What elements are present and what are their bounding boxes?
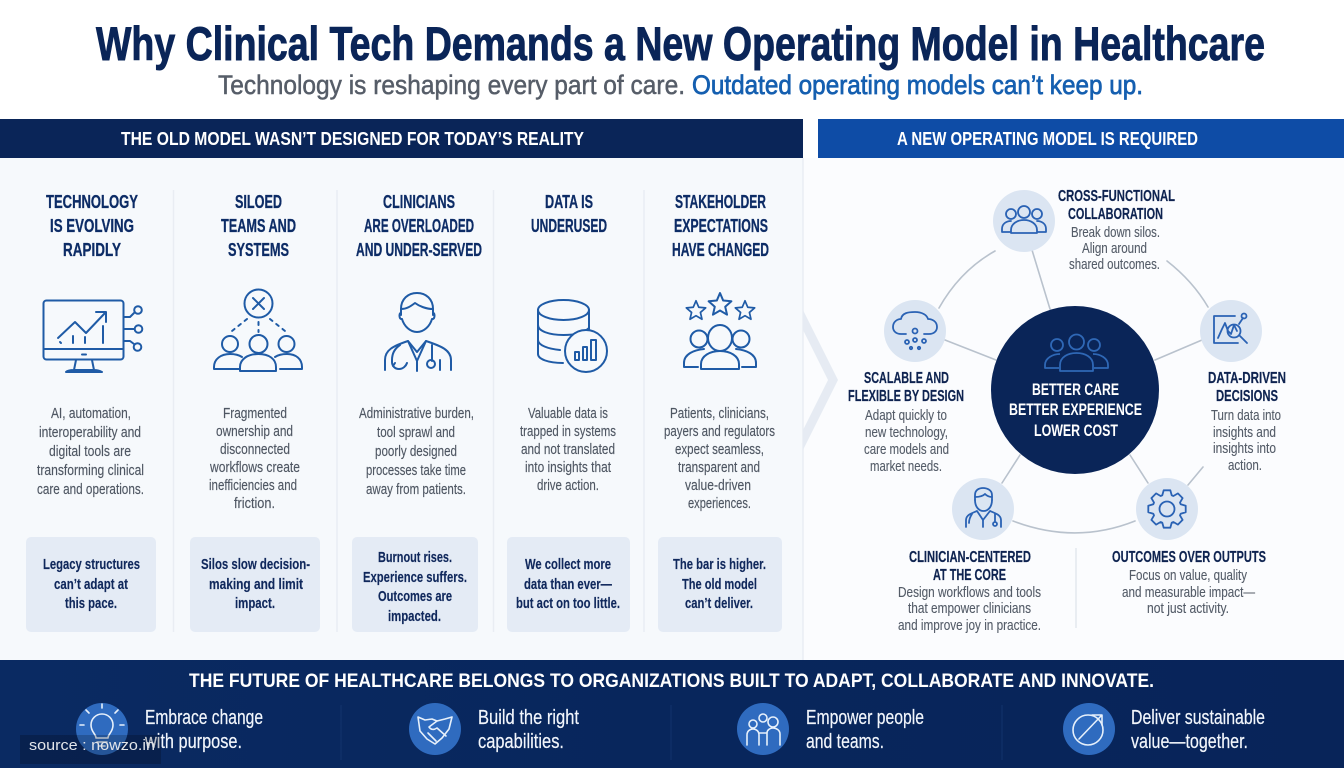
body text [209, 405, 300, 512]
node: data-driven decisions: DECISIONS [1216, 388, 1278, 405]
node: cross-functional collaboration: Break down silos. [1071, 225, 1160, 241]
hub circle [991, 306, 1159, 474]
footer item: deliver value [1063, 703, 1265, 755]
node: scalable and flexible: SCALABLE AND [864, 370, 949, 387]
callout: impacted. [388, 608, 441, 625]
source label: source : nowzo.in [29, 738, 155, 754]
column: clinicians overloaded [352, 191, 482, 632]
heading [672, 191, 769, 260]
footer item: build capabilities: Build the right [478, 706, 579, 729]
heading: SILOED [235, 191, 282, 212]
body text: friction. [234, 495, 275, 512]
heading: AND UNDER-SERVED [356, 239, 482, 260]
body text: ownership and [216, 423, 293, 440]
callout [658, 537, 782, 632]
body text: away from patients. [366, 481, 466, 498]
callout: making and limit [209, 576, 303, 593]
callout: Legacy structures [43, 556, 140, 573]
icon: people [1045, 334, 1108, 371]
node: cross-functional collaboration: CROSS-FUNCTIONAL [1058, 188, 1175, 205]
callout: this pace. [65, 595, 117, 612]
body text: transforming clinical [37, 462, 144, 479]
node: clinician-centered [898, 478, 1041, 634]
icon: cloud network [893, 312, 937, 349]
footer item: deliver value: value—together. [1131, 730, 1248, 753]
callout: Experience suffers. [363, 569, 467, 586]
footer item: deliver value: Deliver sustainable [1131, 706, 1265, 729]
body text: Valuable data is [528, 405, 608, 422]
heading: SYSTEMS [228, 239, 289, 260]
heading: EXPECTATIONS [674, 215, 768, 236]
node: data-driven decisions [1200, 300, 1286, 474]
banner: new model [818, 119, 1344, 158]
node: clinician-centered: and improve joy in practice. [898, 618, 1041, 634]
node: cross-functional collaboration [993, 188, 1175, 273]
callout: The bar is higher. [673, 556, 766, 573]
body text [359, 405, 474, 498]
body text: transparent and [678, 459, 760, 476]
body text: experiences. [688, 495, 751, 512]
body text: Administrative burden, [359, 405, 474, 422]
icon: clinician [966, 488, 1001, 527]
footer heading: THE FUTURE OF HEALTHCARE BELONGS TO ORGANIZATIONS BUILT TO ADAPT, COLLABORATE AND INNOVATE. [189, 671, 1154, 692]
heading [221, 191, 296, 260]
body text: poorly designed [375, 443, 457, 460]
connecting ring and spokes [939, 250, 1208, 533]
body text: tool sprawl and [377, 424, 455, 441]
diagram: operating model hub [848, 188, 1286, 634]
heading: ARE OVERLOADED [364, 215, 474, 236]
node: scalable and flexible: Adapt quickly to [865, 408, 947, 424]
body text: digital tools are [49, 443, 131, 460]
body text [664, 405, 775, 512]
icon: arrow in circle [1073, 715, 1103, 745]
subtitle [218, 70, 1143, 100]
node: outcomes over outputs: Focus on value, quality [1129, 568, 1248, 584]
banner: old model: THE OLD MODEL WASN’T DESIGNED FOR TODAY’S REALITY [121, 128, 585, 149]
node: clinician-centered: Design workflows and tools [898, 585, 1041, 601]
body text: care and operations. [37, 481, 144, 498]
callout [352, 537, 478, 632]
column: data underused [507, 191, 630, 632]
node: data-driven decisions: insights into [1213, 441, 1276, 457]
node: data-driven decisions: insights and [1213, 425, 1276, 441]
heading [531, 191, 607, 236]
column: siloed teams [190, 191, 320, 632]
callout: Burnout rises. [378, 549, 452, 566]
icon: monitor with chart [44, 300, 142, 372]
icon: stars and people [684, 293, 756, 369]
subtitle: Outdated operating models can’t keep up. [692, 70, 1143, 100]
footer item: empower people [737, 703, 924, 755]
column: technology is evolving [26, 191, 156, 632]
node: clinician-centered: CLINICIAN-CENTERED [909, 549, 1031, 566]
node: scalable and flexible: FLEXIBLE BY DESIGN [848, 388, 964, 405]
subtitle: Technology is reshaping every part of care. [218, 70, 685, 100]
arrow: chevron between panels [803, 310, 838, 450]
footer item: build capabilities [409, 703, 579, 755]
node: scalable and flexible: market needs. [870, 459, 942, 475]
footer item: empower people: and teams. [806, 730, 884, 753]
node: data-driven decisions: action. [1228, 458, 1262, 474]
body text [37, 405, 144, 498]
callout: can’t deliver. [685, 595, 753, 612]
footer item: embrace change [76, 703, 263, 755]
node: clinician-centered: that empower clinicians [908, 601, 1031, 617]
body text: workflows create [209, 459, 300, 476]
body text: AI, automation, [51, 405, 131, 422]
icon: team [1002, 206, 1046, 233]
callout: Silos slow decision- [201, 556, 310, 573]
icon: chart and magnifier [1214, 314, 1247, 343]
hub circle: LOWER COST [1034, 421, 1118, 440]
hub circle: BETTER CARE [1032, 380, 1119, 399]
callout: The old model [682, 576, 757, 593]
heading: TEAMS AND [221, 215, 296, 236]
node: scalable and flexible: new technology, [865, 425, 948, 441]
heading: HAVE CHANGED [672, 239, 769, 260]
callout [26, 537, 156, 632]
node: outcomes over outputs [1112, 478, 1266, 617]
icon: light bulb [80, 704, 124, 746]
body text: Fragmented [223, 405, 287, 422]
body text: trapped in systems [520, 423, 616, 440]
footer item: embrace change: with purpose. [144, 730, 242, 753]
footer band [0, 660, 1344, 768]
footer item: embrace change: Embrace change [145, 706, 263, 729]
heading [46, 191, 138, 260]
node: outcomes over outputs: OUTCOMES OVER OUTPUTS [1112, 549, 1266, 566]
icon: gear [1148, 490, 1186, 528]
icon: doctor [385, 293, 451, 371]
banner: old model [0, 119, 803, 158]
callout: Outcomes are [378, 588, 452, 605]
heading: TECHNOLOGY [46, 191, 138, 212]
body text: expect seamless, [675, 441, 764, 458]
heading: IS EVOLVING [50, 215, 134, 236]
body text: Patients, clinicians, [670, 405, 769, 422]
footer item: build capabilities: capabilities. [478, 730, 564, 753]
footer item: empower people: Empower people [806, 706, 924, 729]
node: outcomes over outputs: and measurable impact— [1122, 585, 1255, 601]
body text: payers and regulators [664, 423, 775, 440]
node: scalable and flexible: care models and [864, 442, 949, 458]
callout: We collect more [525, 556, 611, 573]
body text: and not translated [521, 441, 615, 458]
node: cross-functional collaboration: shared outcomes. [1069, 257, 1160, 273]
body text: inefficiencies and [209, 477, 297, 494]
body text: processes take time [366, 462, 466, 479]
node: data-driven decisions: Turn data into [1211, 408, 1281, 424]
heading: STAKEHOLDER [675, 191, 766, 212]
body text: disconnected [220, 441, 290, 458]
heading: CLINICIANS [383, 191, 455, 212]
body text: value-driven [685, 477, 751, 494]
node: scalable and flexible [848, 300, 964, 475]
node: cross-functional collaboration: COLLABORATION [1068, 206, 1163, 223]
body text [520, 405, 616, 494]
banner: new model: A NEW OPERATING MODEL IS REQUIRED [897, 128, 1198, 149]
callout: but act on too little. [516, 595, 620, 612]
callout [507, 537, 630, 632]
heading: DATA IS [545, 191, 593, 212]
icon: people group [747, 714, 780, 745]
icon: handshake [418, 717, 452, 744]
node: data-driven decisions: DATA-DRIVEN [1208, 370, 1286, 387]
heading: RAPIDLY [63, 239, 121, 260]
hub circle: BETTER EXPERIENCE [1009, 400, 1142, 419]
body text: drive action. [537, 477, 599, 494]
body text: into insights that [525, 459, 612, 476]
source label [20, 735, 161, 764]
callout: data than ever— [524, 576, 612, 593]
callout: impact. [235, 595, 275, 612]
column: stakeholder expectations [658, 191, 782, 632]
callout: can’t adapt at [54, 576, 128, 593]
callout [190, 537, 320, 632]
icon: database [538, 300, 607, 372]
icon: siloed people [214, 290, 302, 371]
heading: UNDERUSED [531, 215, 607, 236]
node: outcomes over outputs: not just activity. [1147, 601, 1229, 617]
node: cross-functional collaboration: Align around [1082, 241, 1147, 257]
heading [356, 191, 482, 260]
node: clinician-centered: AT THE CORE [933, 567, 1006, 584]
body text: interoperability and [39, 424, 141, 441]
